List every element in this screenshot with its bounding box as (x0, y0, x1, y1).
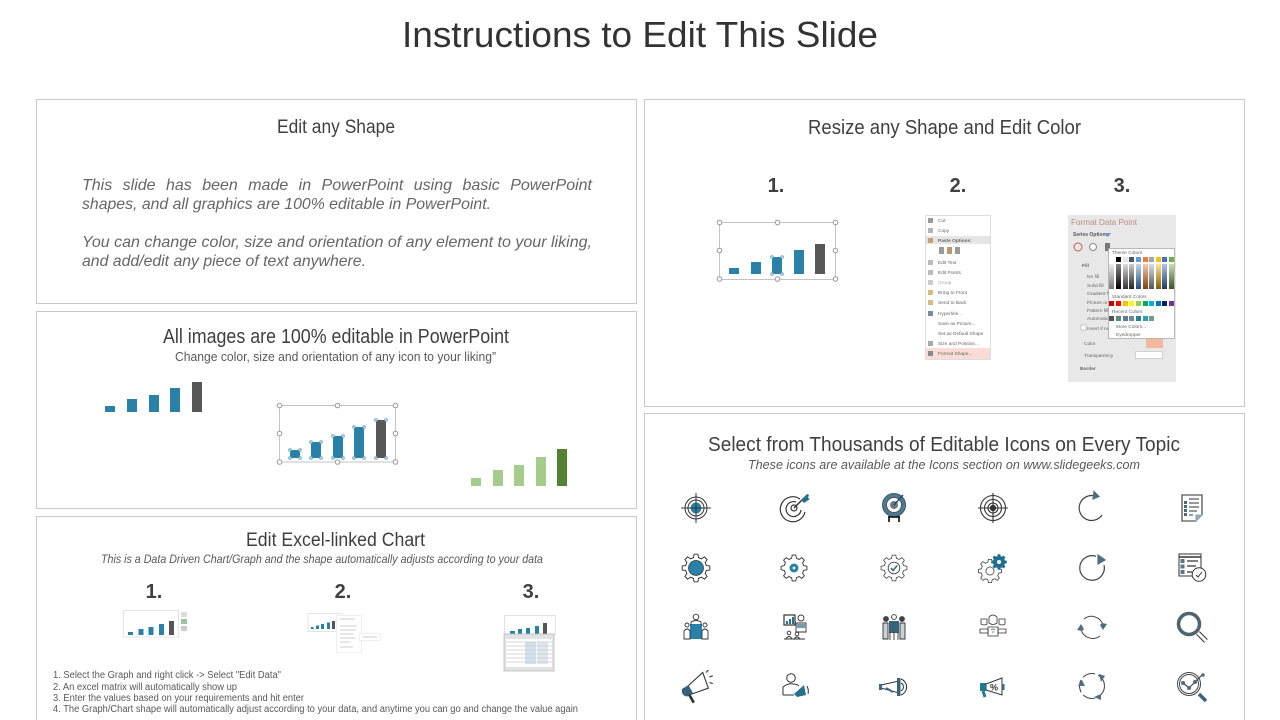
step numbers: 3. (523, 581, 539, 603)
mini screenshot 3: excel matrix (504, 616, 556, 671)
subheading: data driven: This is a Data Driven Chart/Graph and the shape automatically adjusts according to your data (101, 552, 543, 566)
icon: percent megaphone: % (990, 682, 998, 692)
format data point pane screenshot: Transparency (1084, 353, 1114, 359)
context menu screenshot (926, 216, 990, 360)
icon: two gears (978, 555, 1006, 583)
text block: instructions (82, 177, 593, 270)
icon: gear check (881, 555, 907, 581)
context menu screenshot: Edit Points (938, 270, 962, 276)
context menu screenshot: Cut (938, 218, 946, 224)
context menu screenshot: Group (938, 280, 952, 286)
subheading: change color: Change color, size and orientation of any icon to your liking” (175, 349, 496, 364)
format data point pane screenshot: Theme Colors (1112, 250, 1143, 256)
icon: team leader (684, 614, 708, 639)
icon: group discussion (980, 615, 1006, 636)
format data point pane screenshot: Fill (1082, 263, 1089, 269)
panel: resize shape (644, 100, 1244, 406)
context menu screenshot: Set as Default Shape (938, 331, 984, 337)
icon: presenter with chart (784, 615, 806, 639)
icon: person with megaphone (783, 674, 808, 697)
heading: edit any shape: Edit any Shape (277, 117, 395, 138)
context menu screenshot: Size and Position... (938, 341, 979, 347)
chart with selected bar (717, 220, 838, 281)
format data point pane screenshot: Invert if neg (1087, 326, 1112, 332)
panel: icons (644, 414, 1244, 720)
icon: checklist document (1182, 495, 1202, 521)
list: excel instructions: 4. The Graph/Chart shape will automatically adjust according to your data, and anytime you can go and change the value again (53, 704, 578, 715)
icon: gear blue centre (682, 554, 710, 582)
format data point pane screenshot: Picture or (1087, 300, 1108, 306)
format data point pane screenshot: Format Data Point (1071, 217, 1138, 227)
format data point pane screenshot: More Colors... (1116, 324, 1146, 330)
context menu screenshot: Copy (938, 228, 950, 234)
text block: instructions: and add/edit any piece of text anywhere. (82, 253, 366, 270)
format data point pane screenshot: Automatic (1087, 316, 1109, 322)
format data point pane screenshot: Color (1084, 341, 1096, 347)
list: excel instructions (53, 670, 578, 715)
format data point pane screenshot: Recent Colors (1112, 309, 1143, 315)
list: excel instructions: 1. Select the Graph and right click -> Select "Edit Data" (53, 670, 281, 681)
subheading: icons section: These icons are available at the Icons section on www.slidegeeks.com (748, 457, 1140, 472)
text block: instructions: You can change color, size and orientation of any element to your liking, (82, 234, 592, 251)
icon: dart on target (780, 494, 810, 522)
icon: side megaphone (879, 678, 907, 696)
mini screenshot 2: right-click menu (308, 614, 380, 652)
format data point pane screenshot: Solid fill (1087, 283, 1104, 289)
icon: magnifier (1178, 614, 1206, 641)
icon: percent megaphone (980, 678, 1004, 697)
icon: archery target (882, 494, 906, 522)
step numbers (768, 175, 1130, 197)
icon: magnifier with graph (1178, 672, 1206, 701)
icon: business team (883, 615, 905, 640)
format data point pane screenshot (1068, 215, 1176, 382)
format data point pane screenshot: No fill (1087, 274, 1099, 280)
heading: all images: All images are 100% editable in PowerPoint (163, 326, 509, 348)
list: excel instructions: 2. An excel matrix will automatically show up (53, 682, 237, 693)
context menu screenshot: Hyperlink... (938, 311, 962, 317)
bar chart: green (471, 449, 567, 486)
format data point pane screenshot: Series Options (1073, 232, 1109, 238)
icon: megaphone (682, 670, 713, 703)
icon: checklist window (1179, 554, 1206, 581)
heading: select icons: Select from Thousands of Editable Icons on Every Topic (708, 434, 1180, 456)
context menu screenshot: Send to Back (938, 300, 967, 306)
step numbers: 2. (335, 581, 351, 603)
heading: edit excel: Edit Excel-linked Chart (246, 530, 426, 551)
icon: arc arrow (1079, 492, 1102, 520)
text block: instructions: shapes, and all graphics are 100% editable in PowerPoint. (82, 196, 491, 213)
format data point pane screenshot: Eyedropper (1116, 332, 1141, 338)
icon: two arrows cycle (1077, 616, 1107, 638)
panel: edit any shape (36, 100, 636, 304)
icon: three arrows cycle (1078, 674, 1105, 700)
step numbers: 2. (950, 175, 966, 197)
step numbers: 1. (146, 581, 162, 603)
context menu screenshot: Paste Options: (938, 238, 972, 244)
step numbers: 1. (768, 175, 784, 197)
icon: gear small centre (781, 555, 807, 581)
icon: target (681, 493, 711, 523)
panel: all images editable (36, 312, 636, 508)
format data point pane screenshot: Pattern fill (1087, 308, 1108, 314)
text block: instructions: This slide has been made in PowerPoint using basic PowerPoint (82, 177, 593, 194)
step numbers: 3. (1114, 175, 1130, 197)
bar chart: selected (277, 403, 398, 464)
format data point pane screenshot: Gradient fill (1087, 291, 1111, 297)
panel: excel-linked chart (36, 516, 636, 720)
context menu screenshot: Edit Text (938, 260, 957, 266)
context menu screenshot: Bring to Front (938, 290, 968, 296)
bar chart: plain blue (105, 382, 202, 412)
icon: crosshair (978, 493, 1008, 523)
title: Instructions to Edit This Slide (402, 14, 878, 55)
format data point pane screenshot: Standard Colors (1112, 294, 1147, 300)
context menu screenshot: Format Shape... (938, 351, 972, 357)
format data point pane screenshot: 0% (1138, 353, 1146, 359)
icon: circular arrow (1080, 555, 1105, 580)
format data point pane screenshot: Border (1080, 366, 1096, 372)
list: excel instructions: 3. Enter the values based on your requirements and hit enter (53, 693, 305, 704)
heading: resize: Resize any Shape and Edit Color (808, 117, 1081, 139)
step numbers (146, 581, 539, 603)
mini screenshot 1: selected chart (124, 610, 187, 637)
context menu screenshot: Save as Picture... (938, 321, 976, 327)
